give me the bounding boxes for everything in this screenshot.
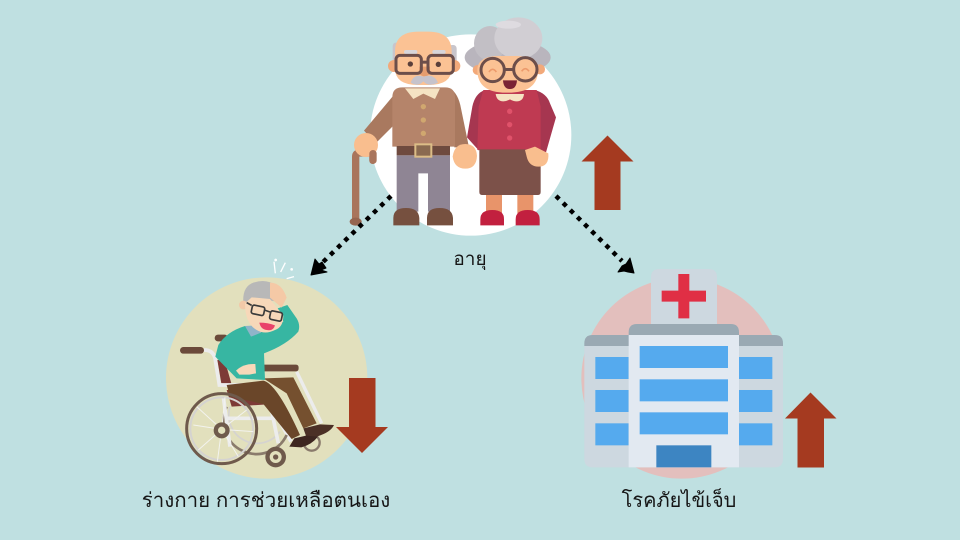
panel: illness, hospital [581,269,783,479]
icon: elderly man with cane [350,32,477,226]
beige circle backdrop [166,277,367,479]
pink circle backdrop [581,278,782,479]
arrow: physical ability trend down [336,378,388,453]
icon: wheelchair frame and rear wheel [180,335,322,454]
panel: age, elderly couple [350,17,571,236]
arrow: dotted to physical ability [311,196,391,275]
white circle backdrop [370,34,571,236]
icon: wheelchair main wheels [187,394,286,467]
icon: elderly woman [465,17,556,225]
label: illness: โรคภัยไข้เจ็บ [622,487,736,512]
label: age: อายุ [453,249,487,271]
label: physical ability and self-care: ร่างกาย การช่วยเหลือตนเอง [142,489,390,512]
arrow: illness trend up [785,392,836,468]
arrow: age trend up [582,136,634,210]
panel: physical ability, man in wheelchair [166,259,367,479]
arrow: dotted to illness [556,196,634,273]
icon: man holding his head [215,259,334,447]
icon: hospital building [584,269,783,467]
